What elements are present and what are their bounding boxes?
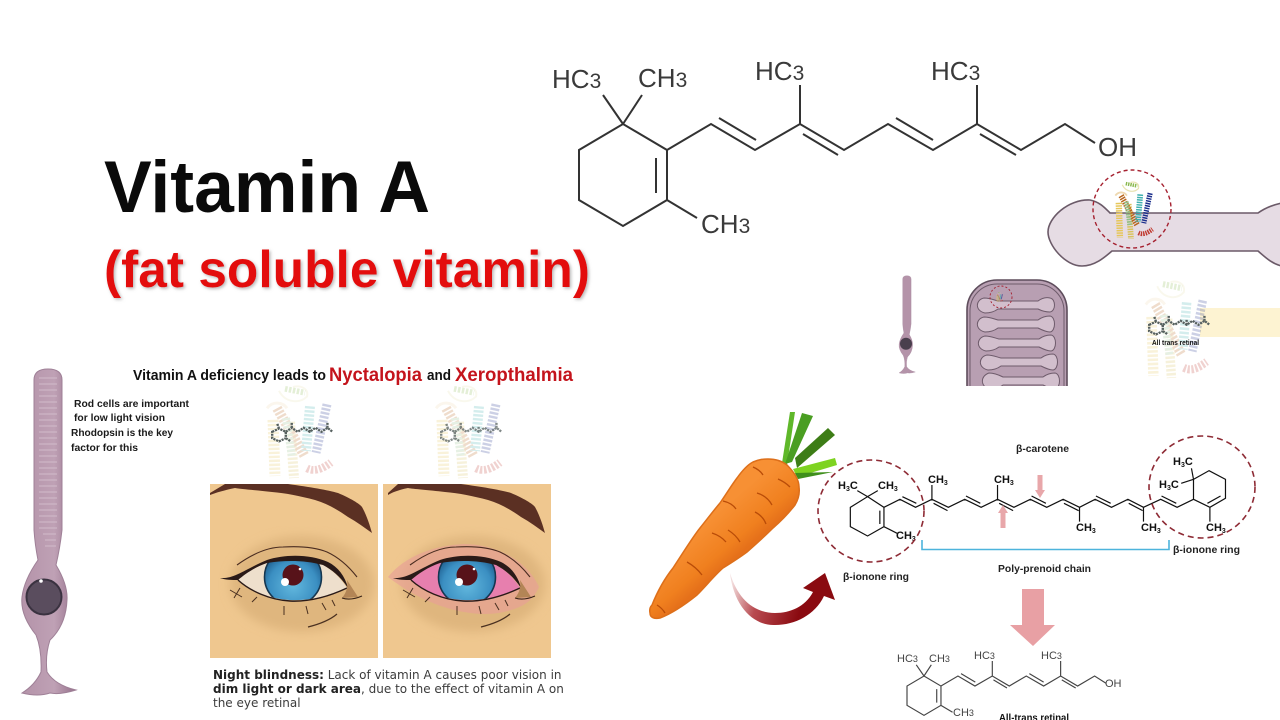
night blindness caption: Night blindness: Lack of vitamin A causes poor vision in [213, 668, 562, 682]
beta-carotene structure: CH [1206, 522, 1222, 534]
poly-prenoid bracket [922, 540, 1169, 550]
title: Vitamin A [104, 147, 430, 228]
cleavage arrow down [1035, 475, 1045, 498]
deficiency heading [133, 365, 573, 386]
iris [264, 561, 322, 600]
icon: carrot [650, 412, 837, 618]
rod cell note: factor for this [71, 442, 138, 454]
rod cell note: for low light vision [74, 412, 165, 424]
carrot leaves [782, 412, 837, 479]
all-trans retinal structure: HC3 [897, 653, 918, 665]
retinol structure [552, 56, 1137, 239]
beta-carotene structure: CH [1141, 522, 1157, 534]
beta-carotene structure: H [1159, 479, 1167, 491]
beta-carotene structure: 3 [1157, 528, 1161, 535]
eyelid lines [220, 556, 348, 588]
rod cell note [71, 398, 189, 454]
beta-carotene structure: C [1171, 479, 1179, 491]
beta-carotene structure: CH [878, 480, 894, 492]
cleavage arrow up [998, 505, 1008, 528]
beta-carotene structure: 3 [912, 536, 916, 543]
small rod cell [899, 276, 915, 374]
all-trans retinal structure: CH3 [953, 707, 974, 719]
retinol structure: HC3 [552, 64, 601, 94]
beta-carotene structure: H [838, 480, 846, 492]
beta-carotene structure: CH [896, 530, 912, 542]
beta-carotene structure: 3 [894, 486, 898, 493]
iris [438, 561, 496, 600]
beta-carotene structure: 3 [846, 486, 850, 493]
deficiency heading: and [427, 368, 451, 384]
retinol structure: CH3 [701, 209, 750, 239]
beta-carotene structure: 3 [1181, 462, 1185, 469]
icon: rhodopsin protein [1115, 182, 1152, 239]
label: beta-ionone ring left: β-ionone ring [843, 572, 909, 583]
retinol structure: OH [1098, 132, 1137, 162]
dashed circle left ionone ring [818, 460, 924, 562]
rod cell note: Rhodopsin is the key [71, 427, 173, 439]
beta-carotene structure: 3 [1222, 528, 1226, 535]
eye illustration: red xerophthalmia [383, 484, 551, 658]
eye illustration: normal [210, 484, 378, 658]
rod outer segment discs [966, 279, 1068, 386]
all-trans retinal structure: OH [1105, 678, 1122, 690]
deficiency heading: Vitamin A deficiency leads to [133, 368, 326, 384]
retinol structure: HC3 [931, 56, 980, 86]
deficiency heading: Nyctalopia [329, 365, 422, 386]
curved arrow carrot to molecule [730, 573, 835, 625]
sclera [238, 559, 347, 600]
deficiency heading: Xeropthalmia [455, 365, 573, 386]
subtitle: (fat soluble vitamin) [104, 241, 590, 299]
big arrow down to retinal [1010, 589, 1055, 646]
beta-carotene structure: CH [994, 474, 1010, 486]
eyelid lines [393, 556, 521, 588]
pink inflamed rim [388, 544, 539, 614]
dashed circle right ionone ring [1149, 436, 1255, 538]
beta-carotene structure: 3 [944, 480, 948, 487]
night blindness caption [213, 668, 564, 710]
beta-carotene structure: H [1173, 456, 1181, 468]
night blindness caption: dim light or dark area, due to the effect of vitamin A on [213, 682, 564, 696]
dashed highlight circle [1093, 170, 1171, 248]
beta-carotene structure: 3 [1010, 480, 1014, 487]
faded protein with all trans retinal: All trans retinal [1152, 340, 1199, 347]
label: beta-carotene: β-carotene [1016, 444, 1069, 455]
beta-carotene structure: CH [928, 474, 944, 486]
all-trans retinal structure: CH3 [929, 653, 950, 665]
rod disc membrane with rhodopsin [1048, 170, 1280, 266]
large rod cell [22, 369, 76, 695]
all-trans retinal structure [897, 650, 1122, 719]
faded protein: retinal right [436, 386, 502, 478]
sclera [411, 559, 520, 600]
retinol structure: CH3 [638, 63, 687, 93]
label: poly-prenoid chain: Poly-prenoid chain [998, 564, 1091, 575]
faded protein with all trans retinal [1146, 282, 1210, 378]
retinol structure: HC3 [755, 56, 804, 86]
label: beta-ionone ring right: β-ionone ring [1173, 545, 1240, 556]
beta-carotene structure: 3 [1167, 485, 1171, 492]
beta-carotene structure: CH [1076, 522, 1092, 534]
night blindness caption: the eye retinal [213, 696, 301, 710]
beta-carotene structure [838, 456, 1226, 543]
nucleus [26, 580, 62, 614]
all-trans retinal structure: HC3 [1041, 650, 1062, 662]
cream band [1200, 308, 1280, 337]
beta-carotene structure: C [850, 480, 858, 492]
faded protein: retinal left [267, 386, 333, 478]
all-trans retinal structure: HC3 [974, 650, 995, 662]
icon: tiny rhodopsin [996, 292, 1003, 302]
beta-carotene structure: C [1185, 456, 1193, 468]
rod cell note: Rod cells are important [74, 398, 189, 410]
beta-carotene structure: 3 [1092, 528, 1096, 535]
